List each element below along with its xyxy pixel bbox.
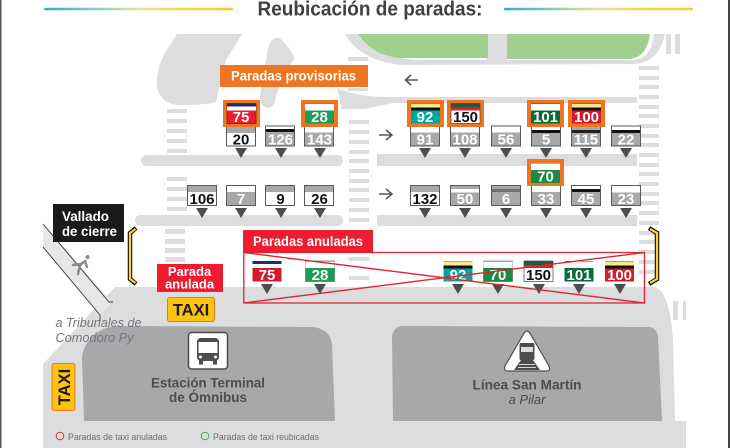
icon: train	[504, 331, 550, 371]
stop 6: 6	[502, 191, 510, 208]
stop 45	[572, 186, 600, 218]
stop 91	[410, 126, 440, 158]
stop 5	[532, 126, 560, 158]
cancelled stop 70	[484, 261, 512, 294]
provisional stop 100: 100	[574, 109, 599, 126]
provisional stop 150	[447, 100, 484, 127]
provisional stop 75	[223, 100, 260, 127]
stop 115: 115	[574, 132, 598, 148]
cancelled stop 100	[605, 261, 634, 294]
taxi sign horizontal: TAXI	[173, 302, 209, 320]
bracket: right fence	[649, 228, 657, 284]
stop 33: 33	[538, 191, 554, 208]
stop 143: 143	[307, 132, 332, 148]
text: estacion terminal: de Ómnibus	[169, 390, 247, 405]
stop 9	[266, 186, 294, 218]
stop 108	[450, 126, 480, 158]
stop 7	[226, 186, 256, 218]
arrow: right row 2	[379, 189, 392, 199]
stop 115	[572, 126, 600, 158]
provisional stop 101: 101	[533, 109, 558, 126]
text: estacion terminal	[151, 376, 265, 405]
stop 45: 45	[578, 191, 594, 208]
stop 9: 9	[276, 191, 285, 208]
provisional stop 75: 75	[233, 109, 249, 126]
callout: vallado de cierre: Vallado	[62, 209, 109, 224]
label: paradas provisorias	[220, 65, 368, 87]
cancelled stop 150: 150	[526, 267, 551, 284]
text: linea san martin: a Pilar	[509, 392, 546, 407]
stop 126: 126	[268, 132, 293, 148]
park	[358, 34, 650, 59]
cancelled stop 28: 28	[312, 267, 328, 284]
label: parada anulada: anulada	[165, 276, 215, 292]
provisional stop 28: 28	[311, 109, 328, 126]
text: a Tribunales de Comodoro Py	[56, 316, 142, 345]
taxi sign vertical	[52, 364, 75, 410]
provisional stop 92: 92	[417, 109, 433, 126]
stop 132	[410, 186, 440, 218]
provisional stop 28	[301, 100, 338, 127]
provisional stop 101	[527, 100, 564, 127]
legend	[56, 432, 319, 443]
text: a Tribunales de Comodoro Py: a Tribunales de	[56, 316, 142, 330]
pedestrian path	[43, 224, 113, 321]
stop 6	[492, 186, 520, 218]
building: train line	[392, 326, 662, 421]
provisional stop 100	[568, 100, 605, 127]
text: linea san martin	[472, 378, 582, 407]
stop 108: 108	[452, 132, 478, 148]
taxi sign vertical: TAXI	[56, 369, 74, 405]
stop 106: 106	[189, 191, 215, 208]
text: linea san martin: Línea San Martín	[472, 378, 582, 392]
cancelled stop 92	[444, 261, 472, 294]
cancelled stop 28	[306, 261, 334, 294]
stop 106	[188, 186, 216, 218]
stop 132: 132	[412, 191, 438, 208]
provisional stop 70: 70	[537, 168, 554, 186]
stop 56: 56	[498, 132, 514, 148]
stops row 2 right	[410, 186, 640, 218]
icon: bus	[188, 332, 228, 369]
label: paradas provisorias: Paradas provisorias	[231, 68, 356, 84]
label: parada anulada	[157, 264, 223, 292]
building: bus terminal	[82, 326, 335, 421]
stop 23	[612, 186, 640, 218]
provisional stop 150: 150	[453, 109, 478, 126]
stop 20: 20	[233, 132, 249, 148]
stop 50: 50	[457, 191, 473, 208]
stops row 1 left	[226, 126, 334, 158]
cancelled stop 75: 75	[259, 267, 275, 284]
arrow: right row 1	[379, 130, 392, 140]
cancelled stop 70: 70	[490, 267, 506, 284]
legend: Paradas de taxi anuladas	[68, 432, 167, 443]
callout: vallado de cierre	[53, 204, 124, 242]
stops row 1 right	[410, 126, 640, 158]
provisional stop 92	[407, 100, 444, 127]
text: estacion terminal: Estación Terminal	[151, 376, 265, 390]
cancelled stop 92: 92	[450, 267, 466, 284]
cancelled stop 75	[252, 261, 282, 294]
cancellation cross	[244, 252, 645, 303]
cancelled stop 100: 100	[607, 267, 632, 284]
bracket: left fence	[130, 228, 136, 284]
panel: paradas anuladas: Paradas anuladas	[253, 234, 363, 249]
arrow: left	[406, 75, 418, 85]
provisional stop 70	[527, 159, 564, 186]
stops row 2 left	[188, 186, 334, 218]
stop 26	[304, 186, 334, 218]
stop 22	[612, 126, 640, 158]
taxi sign horizontal	[168, 298, 214, 322]
stop 26: 26	[311, 191, 328, 208]
stop 5: 5	[542, 132, 550, 148]
panel: paradas anuladas	[243, 230, 644, 303]
stop 56	[492, 126, 520, 158]
stop 33	[532, 186, 560, 218]
legend: Paradas de taxi reubicadas	[213, 432, 319, 443]
stop 50	[450, 186, 480, 218]
stop 91: 91	[417, 132, 433, 148]
cancelled stop 150	[524, 261, 553, 294]
label: parada anulada: Parada	[168, 264, 212, 279]
cancelled stop 101: 101	[566, 267, 592, 284]
provisional stops	[223, 100, 605, 186]
callout: vallado de cierre: de cierre	[62, 224, 117, 239]
cancelled stop 101	[564, 261, 594, 294]
stop 22: 22	[618, 132, 634, 148]
icon: walker	[73, 255, 90, 274]
text: a Tribunales de Comodoro Py: Comodoro Py	[56, 331, 134, 345]
stop 23: 23	[618, 191, 634, 208]
stop 7: 7	[237, 191, 245, 208]
